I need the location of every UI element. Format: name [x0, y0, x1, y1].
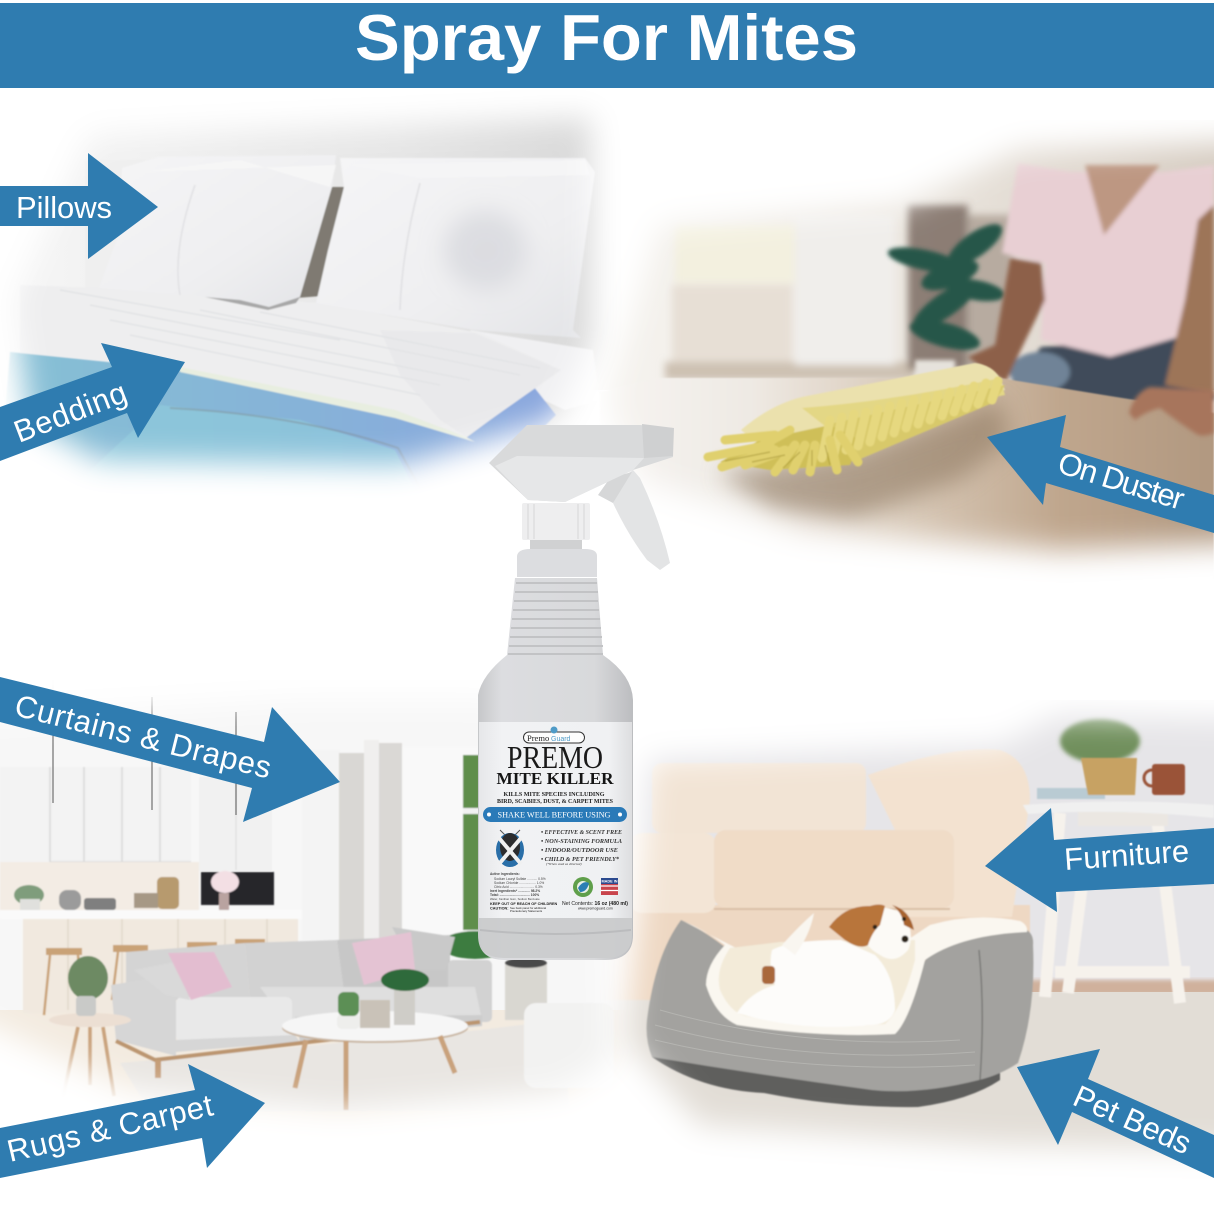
spray bottle: MITE KILLER — [496, 769, 615, 788]
arrow: Furniture: Furniture — [1063, 833, 1190, 877]
caution: See back panel for additional — [510, 906, 546, 910]
ingredients: Citric Acid ........................... 0.3% — [494, 885, 543, 889]
oven — [201, 872, 274, 905]
ottoman — [524, 1003, 614, 1088]
arrow: Bedding: Bedding — [9, 375, 132, 450]
title banner — [0, 1, 1214, 88]
species text: BIRD, SCABIES, DUST, & CARPET MITES — [497, 798, 614, 805]
kitchen cabinets — [0, 767, 191, 862]
bed shadow base — [652, 1040, 1000, 1107]
side table — [1045, 810, 1180, 1003]
photo: bed with pillows and bedding — [6, 108, 604, 486]
species text: KILLS MITE SPECIES INCLUDING — [504, 791, 605, 798]
caution — [490, 902, 557, 913]
photo: woman dusting a table — [610, 126, 1214, 570]
title text: Spray For Mites — [355, 1, 858, 74]
trigger — [613, 470, 670, 570]
person — [968, 163, 1214, 403]
species text — [497, 791, 614, 805]
arrow: On Duster: On Duster — [1054, 445, 1189, 517]
red mug — [1152, 764, 1185, 795]
benefits list: • NON-STAINING FORMULA — [541, 839, 622, 845]
pillows — [182, 997, 190, 1000]
yellow duster — [708, 363, 1005, 472]
arrow: Pillows — [0, 153, 158, 259]
neck — [517, 549, 597, 577]
arrow: Pillows: Pillows — [16, 190, 112, 225]
ingredients: Sodium Lauryl Sulfate ........... 0.5% — [494, 877, 546, 881]
benefits list: • EFFECTIVE & SCENT FREE — [541, 830, 622, 836]
net contents — [562, 901, 628, 910]
flowers — [211, 871, 239, 893]
outdoor plant — [449, 930, 492, 960]
spray head — [489, 425, 673, 502]
arrow: Curtains & Drapes — [0, 677, 340, 822]
decor on table — [360, 1000, 390, 1028]
caution: CAUTION: — [490, 906, 509, 910]
benefits list: • INDOOR/OUTDOOR USE — [541, 848, 618, 854]
coffee table — [282, 1027, 468, 1044]
ingredients: Inert Ingredients* ............. 98.2% — [490, 889, 540, 893]
net contents: Net Contents: 16 oz (480 ml) — [562, 901, 628, 907]
sofa — [600, 905, 1030, 1000]
arrow: Curtains & Drapes: Curtains & Drapes — [11, 688, 275, 785]
counter items — [157, 877, 179, 909]
left pillow — [242, 156, 335, 299]
photo: living room with curtains and rug — [0, 697, 616, 1118]
label — [479, 722, 632, 918]
lower sheet — [470, 330, 600, 410]
ingredients: Water, Xanthan Gum, Sodium Benzoate — [490, 897, 540, 901]
caution: KEEP OUT OF REACH OF CHILDREN — [490, 902, 557, 906]
benefits list: • CHILD & PET FRIENDLY* — [541, 856, 620, 863]
dog head — [856, 908, 911, 959]
ingredients: Sodium Chloride .................. 1.0% — [494, 881, 544, 885]
brand logo: Guard — [551, 736, 571, 743]
photo: sofa and dog bed — [614, 709, 1214, 1160]
brand logo — [524, 726, 584, 743]
blue quilt — [7, 352, 556, 481]
arrow: Rugs & Carpet: Rugs & Carpet — [4, 1087, 217, 1169]
plant in basket — [1060, 719, 1140, 763]
arrow: Rugs & Carpet — [0, 1064, 265, 1178]
bed inner — [683, 917, 1027, 1035]
arrow: Pet Beds — [1017, 1049, 1214, 1178]
icon: eco seal — [573, 877, 593, 897]
book — [1037, 788, 1105, 799]
icon: crossed-out mite — [496, 830, 524, 867]
arrow: On Duster — [987, 415, 1214, 533]
sofa — [126, 943, 250, 1000]
planter — [505, 963, 547, 1020]
stools — [46, 948, 82, 955]
ingredients — [490, 872, 546, 901]
collar — [522, 503, 590, 540]
side table — [49, 1013, 131, 1027]
arrow: Furniture — [985, 808, 1214, 912]
right hand on table — [1129, 387, 1214, 436]
rug — [122, 1026, 523, 1099]
window and curtains — [302, 750, 340, 940]
icon: made in USA flag: MADE IN — [601, 880, 618, 884]
benefits list — [541, 830, 622, 866]
arrow: Bedding — [0, 343, 185, 461]
caution: Precautionary Statements — [510, 909, 543, 913]
spray bottle — [478, 424, 674, 960]
icon: made in USA flag — [601, 878, 618, 895]
shake banner: SHAKE WELL BEFORE USING — [498, 810, 611, 820]
dog bed — [647, 920, 1033, 1091]
dog body — [737, 940, 895, 1027]
backsplash — [0, 862, 199, 910]
arrow: Pet Beds: Pet Beds — [1068, 1078, 1197, 1161]
right pillow — [316, 158, 595, 338]
net contents: www.premoguard.com — [578, 906, 613, 910]
benefits list: (*When used as directed) — [546, 862, 582, 866]
headboard gap — [296, 187, 344, 298]
base shading — [479, 918, 632, 958]
ribs — [508, 583, 603, 654]
ingredients: Total: ................................. 100% — [490, 893, 539, 897]
counter — [20, 909, 230, 914]
shake banner — [483, 807, 627, 822]
table — [612, 378, 1214, 570]
product name: PREMO — [507, 739, 603, 775]
ingredients: Active Ingredients: — [490, 872, 520, 876]
duvet folded edge — [180, 367, 475, 442]
plant — [886, 217, 1008, 380]
body — [478, 578, 633, 960]
brand logo: Premo — [527, 733, 549, 743]
